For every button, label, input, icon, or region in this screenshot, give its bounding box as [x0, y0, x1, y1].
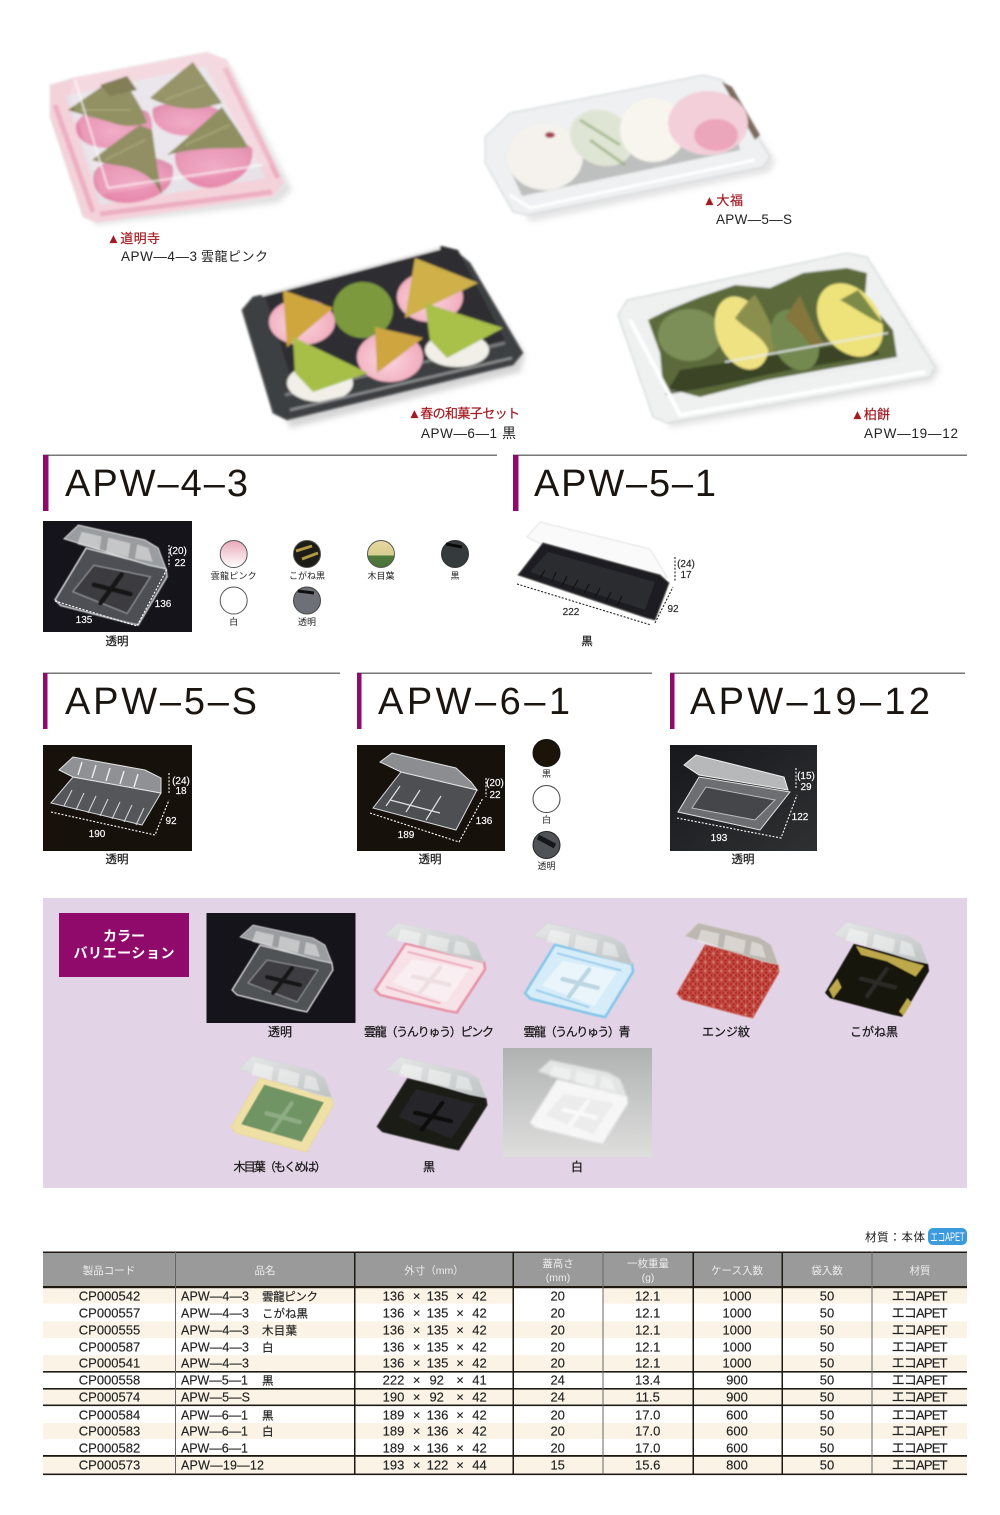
row CP000587: ×: [413, 1340, 420, 1354]
row CP000583: [79, 1424, 948, 1438]
row CP000555: 136: [383, 1322, 404, 1338]
row CP000555: 135: [427, 1322, 448, 1338]
row CP000573: 15.6: [635, 1458, 660, 1472]
product photo: clear six-cell tray with dimensions: (20): [486, 778, 504, 789]
row CP000557: ×: [413, 1306, 420, 1320]
variation: こがね黒: こがね黒: [850, 1024, 898, 1039]
row CP000558: ×: [456, 1372, 464, 1388]
row CP000542: エコAPET: [892, 1288, 948, 1304]
swatch: 白: 白: [542, 814, 551, 825]
row CP000573: ×: [413, 1458, 420, 1472]
product photo: black long tray with dimensions: 222: [563, 607, 580, 618]
section: APW-5-S: [43, 672, 340, 866]
row CP000573: 122: [427, 1458, 448, 1472]
row CP000557: エコAPET: [892, 1306, 948, 1320]
section: APW-4-3: [43, 454, 497, 648]
label: 黒: 黒: [581, 635, 593, 648]
swatch: 透明: [533, 832, 560, 871]
caption: 大福: APW—5—S: [716, 212, 792, 227]
row CP000541: ×: [456, 1356, 464, 1370]
row CP000587: ×: [456, 1340, 464, 1354]
product photo: clear tray with dimensions: (20): [169, 546, 187, 557]
section: APW-5-1: [513, 454, 967, 648]
product photo: clear narrow tray with dimensions: [43, 745, 192, 851]
row CP000558: 41: [472, 1372, 487, 1388]
row CP000583: 600: [726, 1424, 748, 1438]
table header: ケース入数: [711, 1264, 763, 1277]
row CP000587: APW—4—3: [181, 1340, 249, 1354]
row CP000558: [79, 1372, 948, 1388]
row CP000541: 20: [550, 1356, 565, 1370]
row CP000583: 50: [820, 1424, 834, 1438]
row CP000574: APW—5—S: [181, 1390, 250, 1404]
row CP000574: 42: [472, 1390, 487, 1404]
row CP000557: [79, 1306, 948, 1320]
row CP000555: 1000: [723, 1322, 751, 1338]
product photo: clear deep tray with dimensions: 193: [711, 833, 728, 844]
row CP000541: 136: [383, 1356, 404, 1370]
badge: カラーバリエーション: カラー: [103, 928, 145, 944]
label: 透明: 透明: [106, 853, 128, 866]
row CP000541: 135: [427, 1356, 448, 1370]
row CP000582: CP000582: [79, 1440, 140, 1456]
row CP000558: エコAPET: [892, 1372, 948, 1388]
heading: APW-5-S: [43, 672, 340, 729]
swatch: 白: [533, 786, 560, 825]
row CP000584: APW—6—1: [181, 1408, 248, 1422]
row CP000557: CP000557: [79, 1306, 140, 1320]
row CP000542: [79, 1288, 948, 1304]
row CP000542: 135: [427, 1288, 448, 1304]
row CP000582: 600: [726, 1440, 748, 1456]
product photo: clear narrow tray with dimensions: 190: [89, 829, 106, 840]
row CP000573: [79, 1458, 948, 1472]
caption: 大福: [703, 193, 792, 227]
product photo: clear narrow tray with dimensions: 18: [175, 786, 187, 797]
swatch: 白: 白: [229, 616, 238, 627]
row CP000584: 50: [820, 1408, 834, 1422]
row CP000584: [79, 1408, 948, 1422]
label: 透明: 透明: [106, 635, 128, 648]
row CP000557: ×: [456, 1306, 464, 1320]
row CP000583: CP000583: [79, 1424, 140, 1438]
badge: カラーバリエーション: バリエーション: [74, 945, 174, 961]
variation: 雲龍青: 雲龍（うんりゅう）青: [524, 1025, 630, 1039]
row CP000582: エコAPET: [892, 1440, 948, 1456]
row CP000555: 20: [550, 1322, 565, 1338]
row CP000557: こがね黒: [262, 1306, 308, 1320]
product photo: APW-6-1 spring sweets set: [242, 246, 525, 428]
variation: 雲龍ピンク: [364, 923, 494, 1039]
material note: 材質：本体: [865, 1230, 926, 1244]
caption: 春の和菓子セット: [408, 406, 520, 441]
row CP000583: 136: [427, 1424, 448, 1438]
heading: APW-4-3: [43, 454, 497, 511]
row CP000574: 190: [383, 1390, 404, 1404]
panel: color variations: [43, 898, 967, 1188]
row CP000573: CP000573: [79, 1458, 140, 1472]
row CP000557: 135: [427, 1306, 448, 1320]
row CP000583: APW—6—1: [181, 1424, 248, 1438]
product photo: black long tray with dimensions: [517, 522, 695, 625]
label: 透明: 透明: [418, 853, 442, 866]
row CP000541: 42: [472, 1356, 487, 1370]
table header: (g): [642, 1272, 654, 1284]
row CP000584: 136: [427, 1408, 448, 1422]
row CP000573: 50: [820, 1458, 834, 1472]
row CP000557: 42: [472, 1306, 487, 1320]
variation: 透明: 透明: [268, 1025, 292, 1039]
product photo: clear tray with dimensions: 136: [155, 599, 172, 610]
section: APW-6-1: [357, 672, 652, 871]
specification table: [43, 1252, 967, 1475]
caption: 柏餅: [851, 407, 958, 441]
table header: 材質: [910, 1264, 930, 1277]
row CP000582: ×: [456, 1440, 464, 1456]
caption: 道明寺: APW—4—3: [121, 249, 197, 264]
variation: エンジ紋: [677, 923, 779, 1039]
row CP000573: 44: [472, 1458, 487, 1472]
row CP000587: 20: [550, 1340, 565, 1354]
variation: 木目葉: 木目葉（もくめは）: [234, 1160, 326, 1174]
row CP000555: 50: [820, 1322, 834, 1338]
heading: APW-6-1: APW–6–1: [378, 681, 570, 723]
row CP000542: 20: [550, 1288, 565, 1304]
row CP000541: CP000541: [79, 1356, 140, 1370]
row CP000558: 13.4: [635, 1372, 660, 1388]
row CP000583: 42: [472, 1424, 487, 1438]
product photo: black long tray with dimensions: (24): [677, 559, 695, 570]
row CP000584: 20: [550, 1408, 565, 1422]
row CP000573: APW—19—12: [181, 1458, 264, 1472]
heading: APW-5-1: [513, 454, 967, 511]
row CP000583: ×: [456, 1424, 464, 1438]
table header: [43, 1252, 967, 1287]
row CP000557: 20: [550, 1306, 565, 1320]
variation: 黒: [377, 1057, 487, 1174]
row CP000555: ×: [456, 1322, 464, 1338]
row CP000541: 1000: [723, 1356, 751, 1370]
row CP000583: 17.0: [635, 1424, 660, 1438]
row CP000574: CP000574: [79, 1390, 140, 1404]
row CP000574: [79, 1390, 948, 1404]
row CP000555: ×: [413, 1322, 420, 1338]
row CP000542: APW—4—3: [181, 1290, 249, 1304]
row CP000557: APW—4—3: [181, 1306, 249, 1320]
caption: 道明寺: 雲龍ピンク: [201, 249, 268, 264]
swatch: こがね黒: [289, 540, 325, 581]
variation: エンジ紋: エンジ紋: [702, 1024, 750, 1039]
row CP000584: 黒: [262, 1410, 274, 1422]
heading: APW-4-3: APW–4–3: [65, 463, 248, 505]
caption: 春の和菓子セット: ▲春の和菓子セット: [408, 406, 520, 421]
product photo: black long tray with dimensions: 17: [680, 570, 692, 581]
row CP000558: 222: [383, 1372, 404, 1388]
row CP000587: 42: [472, 1340, 487, 1354]
row CP000557: 12.1: [635, 1306, 660, 1320]
row CP000582: 136: [427, 1440, 448, 1456]
row CP000558: 92: [429, 1372, 444, 1388]
row CP000574: エコAPET: [892, 1390, 948, 1404]
row CP000584: ×: [456, 1408, 464, 1422]
row CP000541: [79, 1356, 948, 1370]
row CP000582: 42: [472, 1440, 487, 1456]
row CP000583: ×: [413, 1424, 420, 1438]
row CP000584: 42: [472, 1408, 487, 1422]
row CP000541: 50: [820, 1356, 834, 1370]
heading: APW-5-S: APW–5–S: [65, 681, 257, 723]
row CP000542: ×: [413, 1288, 420, 1304]
row CP000582: 189: [383, 1440, 404, 1456]
variation: 透明: [206, 913, 356, 1039]
row CP000542: 50: [820, 1288, 834, 1304]
row CP000584: CP000584: [79, 1408, 140, 1422]
table header: 袋入数: [811, 1264, 843, 1277]
caption: 春の和菓子セット: 黒: [502, 425, 516, 441]
product photo: clear narrow tray with dimensions: (24): [172, 776, 190, 787]
table header: 蓋高さ: [542, 1257, 574, 1270]
row CP000557: 50: [820, 1306, 834, 1320]
row CP000582: 50: [820, 1440, 834, 1456]
variation: 黒: 黒: [423, 1160, 435, 1174]
row CP000555: 12.1: [635, 1322, 660, 1338]
caption: 道明寺: ▲道明寺: [107, 231, 160, 246]
row CP000542: ×: [456, 1288, 464, 1304]
row CP000574: 50: [820, 1390, 834, 1404]
row CP000587: エコAPET: [892, 1340, 948, 1354]
row CP000582: 17.0: [635, 1440, 660, 1456]
row CP000587: 50: [820, 1340, 834, 1354]
row CP000542: 12.1: [635, 1288, 660, 1304]
row CP000555: [79, 1322, 948, 1338]
swatch: 木目葉: 木目葉: [367, 570, 395, 581]
caption: 春の和菓子セット: APW—6—1: [421, 426, 497, 441]
row CP000555: 42: [472, 1322, 487, 1338]
swatch: 黒: [533, 740, 560, 779]
swatch: 透明: [294, 587, 320, 627]
row CP000557: 1000: [723, 1306, 751, 1320]
caption: 道明寺: [107, 231, 268, 264]
swatch: こがね黒: こがね黒: [289, 570, 325, 581]
table header: 品名: [254, 1264, 276, 1277]
row CP000574: 900: [726, 1390, 748, 1404]
row CP000542: 136: [383, 1288, 404, 1304]
row CP000573: ×: [456, 1458, 464, 1472]
table header: 外寸（mm）: [404, 1264, 464, 1277]
product photo: clear tray with dimensions: [43, 521, 192, 632]
variation: 雲龍青: [524, 923, 633, 1039]
product photo: clear six-cell tray with dimensions: 189: [398, 830, 415, 841]
row CP000583: 20: [550, 1424, 565, 1438]
row CP000541: エコAPET: [892, 1356, 948, 1370]
heading: APW-5-1: APW–5–1: [534, 463, 716, 505]
row CP000541: ×: [413, 1356, 420, 1370]
row CP000574: ×: [456, 1390, 464, 1404]
row CP000542: 42: [472, 1288, 487, 1304]
row CP000574: 92: [429, 1390, 444, 1404]
row CP000574: 11.5: [636, 1390, 660, 1404]
row CP000542: CP000542: [79, 1288, 140, 1304]
variation: 白: [503, 1048, 652, 1174]
variation: 白: 白: [571, 1159, 583, 1174]
row CP000582: 20: [550, 1440, 565, 1456]
row CP000582: ×: [413, 1440, 420, 1456]
swatch: 雲龍ピンク: 雲龍ピンク: [211, 570, 257, 581]
row CP000582: APW—6—1: [181, 1442, 248, 1456]
product photo: clear deep tray with dimensions: 122: [792, 812, 809, 823]
row CP000573: 15: [550, 1458, 565, 1472]
swatch: 白: [220, 587, 247, 627]
table header: 一枚重量: [627, 1257, 669, 1270]
product photo: APW-4-3 sakura mochi: [50, 52, 292, 225]
product photo: clear tray with dimensions: 135: [76, 615, 93, 626]
swatch: 透明: 透明: [537, 861, 556, 871]
row CP000584: 189: [383, 1408, 404, 1422]
row CP000573: エコAPET: [892, 1458, 948, 1472]
row CP000587: 1000: [723, 1340, 751, 1354]
row CP000587: 白: [262, 1340, 274, 1354]
row CP000587: 136: [383, 1340, 404, 1354]
row CP000542: 雲龍ピンク: [262, 1290, 318, 1304]
material note: [865, 1228, 967, 1245]
swatch: 木目葉: [367, 540, 395, 581]
caption: 大福: ▲大福: [703, 193, 743, 208]
badge: エコAPET: エコAPET: [930, 1232, 964, 1244]
row CP000555: APW—4—3: [181, 1324, 249, 1338]
row CP000573: 800: [726, 1458, 748, 1472]
row CP000573: 193: [383, 1458, 404, 1472]
product photo: clear tray with dimensions: 22: [174, 558, 186, 569]
row CP000558: CP000558: [79, 1372, 140, 1388]
row CP000542: 1000: [723, 1288, 751, 1304]
row CP000583: エコAPET: [892, 1424, 948, 1438]
product photo: clear narrow tray with dimensions: 92: [165, 816, 177, 827]
swatch: 雲龍ピンク: [211, 540, 257, 581]
product photo: clear deep tray with dimensions: 29: [800, 782, 812, 793]
row CP000584: エコAPET: [892, 1408, 948, 1422]
section: APW-19-12: [670, 672, 965, 866]
row CP000574: ×: [413, 1390, 420, 1404]
product photo: clear deep tray with dimensions: (15): [797, 771, 815, 782]
product photo: clear deep tray with dimensions: [670, 745, 817, 851]
row CP000555: エコAPET: [892, 1322, 948, 1338]
row CP000587: 12.1: [635, 1340, 660, 1354]
row CP000558: APW—5—1: [181, 1374, 248, 1388]
variation: 雲龍ピンク: 雲龍（うんりゅう）ピンク: [364, 1025, 494, 1039]
heading: APW-19-12: [670, 672, 965, 729]
row CP000558: 24: [550, 1372, 565, 1388]
caption: 柏餅: APW—19—12: [864, 426, 958, 441]
product photo: black long tray with dimensions: 92: [667, 604, 679, 615]
product photo: clear six-cell tray with dimensions: 22: [489, 790, 501, 801]
row CP000587: 135: [427, 1340, 448, 1354]
table header: 製品コード: [83, 1264, 135, 1277]
label: 透明: 透明: [732, 853, 754, 866]
variation: 木目葉: [231, 1056, 333, 1174]
row CP000558: 50: [820, 1372, 834, 1388]
row CP000587: CP000587: [79, 1340, 140, 1354]
row CP000555: CP000555: [79, 1322, 140, 1338]
row CP000584: 600: [726, 1408, 748, 1422]
row CP000574: 24: [550, 1390, 565, 1404]
row CP000582: [79, 1440, 948, 1456]
swatch: 黒: 黒: [450, 571, 460, 581]
row CP000587: [79, 1340, 948, 1354]
table header: (mm): [546, 1272, 570, 1284]
swatch: 黒: 黒: [542, 769, 551, 779]
row CP000584: 17.0: [635, 1408, 660, 1422]
badge: カラーバリエーション: [59, 913, 189, 977]
row CP000583: 白: [262, 1424, 274, 1438]
row CP000558: ×: [413, 1372, 420, 1388]
row CP000541: APW—4—3: [181, 1356, 249, 1370]
row CP000558: 黒: [262, 1374, 274, 1388]
heading: APW-6-1: [357, 672, 652, 729]
row CP000555: 木目葉: [262, 1324, 298, 1338]
row CP000557: 136: [383, 1306, 404, 1320]
row CP000583: 189: [383, 1424, 404, 1438]
row CP000558: 900: [726, 1372, 748, 1388]
swatch: 透明: 透明: [298, 617, 316, 627]
variation: こがね黒: [825, 922, 929, 1039]
product photo: APW-5-S daifuku: [485, 75, 775, 222]
heading: APW-19-12: APW–19–12: [690, 681, 930, 723]
product photo: clear six-cell tray with dimensions: 136: [476, 816, 493, 827]
product photo: APW-19-12 kashiwa mochi: [618, 253, 940, 428]
caption: 柏餅: ▲柏餅: [851, 407, 890, 422]
swatch: 黒: [442, 540, 468, 581]
row CP000584: ×: [413, 1408, 420, 1422]
row CP000541: 12.1: [635, 1356, 660, 1370]
product photo: clear six-cell tray with dimensions: [357, 745, 505, 851]
